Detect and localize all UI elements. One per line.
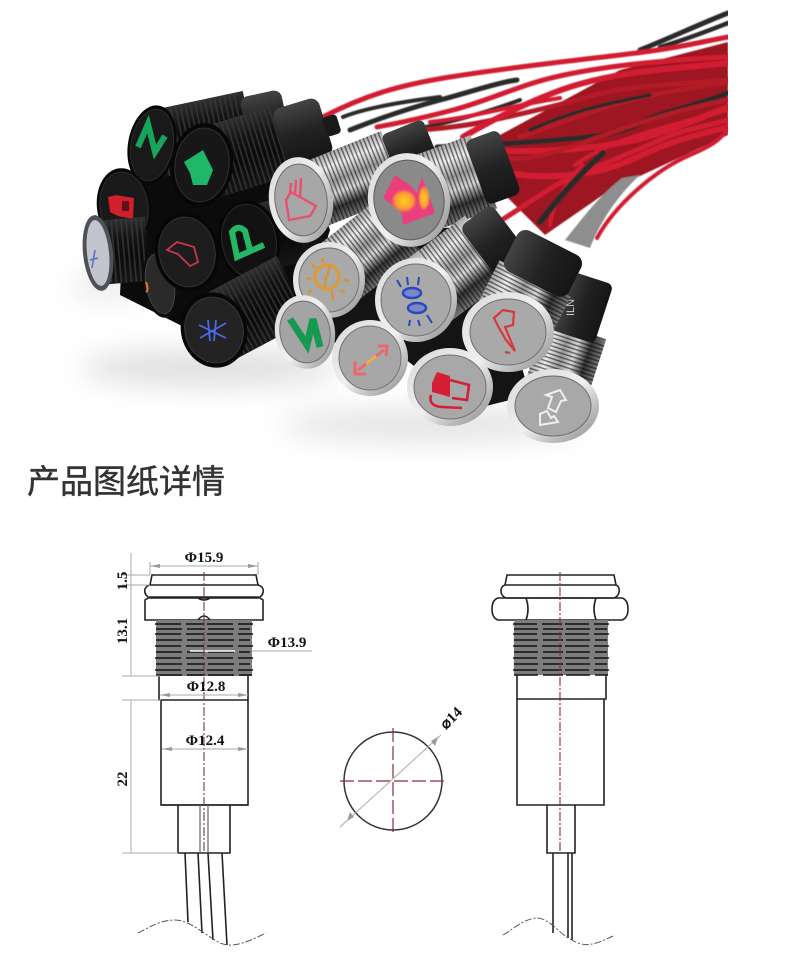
technical drawing: dimensioned front view (115, 550, 312, 945)
technical drawing: dimensioned front view: 13.1 (115, 618, 131, 644)
technical drawing: dimensioned front view: Φ12.4 (186, 733, 225, 749)
wire bundle (323, 13, 728, 248)
black LED: green arrow (171, 98, 341, 202)
black LED: blue symbol (180, 256, 294, 368)
dark mass behind chrome lights (300, 225, 530, 410)
chrome LED: white arrows with ILN sleeve: ILN (565, 299, 577, 316)
technical drawing: dimensioned front view: Φ13.9 (268, 635, 306, 651)
black LED: red hood symbol (155, 216, 216, 288)
technical drawing: dimensioned front view: 1.5 (115, 572, 131, 590)
technical drawing: dimensioned front view: Φ12.8 (187, 679, 225, 695)
chrome LED: yellow-pink big arrow (368, 131, 520, 247)
black LED: green N (127, 90, 284, 184)
technical drawing: dimensioned front view: 22 (115, 772, 131, 786)
black LED: small orange glyph (142, 254, 176, 318)
black LED: red fuel (96, 168, 149, 226)
chrome LED: white arrows with ILN sleeve (507, 273, 612, 443)
chrome LED: pink lamp (268, 120, 434, 243)
dimension labels: Φ15.9 (185, 550, 223, 566)
dark mass behind black lights (120, 176, 330, 326)
technical drawing: round face view: ⌀14 (438, 704, 466, 733)
technical drawing: side view (492, 572, 628, 945)
chrome LED: green Z (274, 295, 336, 369)
technical drawing: round face view (340, 704, 466, 834)
soft shadow under the lights (70, 269, 580, 441)
black LED: green P (221, 200, 300, 275)
product photo: LED indicator lights with wires (70, 13, 728, 443)
chrome LED: red wiper (462, 225, 589, 372)
front view outline (138, 572, 266, 945)
chrome LED: orange sun (293, 198, 421, 318)
heading: 产品图纸详情 (27, 463, 225, 500)
black LED: small white-rim side view (82, 215, 148, 291)
chrome LED: pink double arrow (332, 320, 408, 396)
chrome LED: red fuel (407, 348, 493, 426)
chrome LED: blue beams (375, 206, 516, 342)
dimension lines (122, 553, 312, 853)
